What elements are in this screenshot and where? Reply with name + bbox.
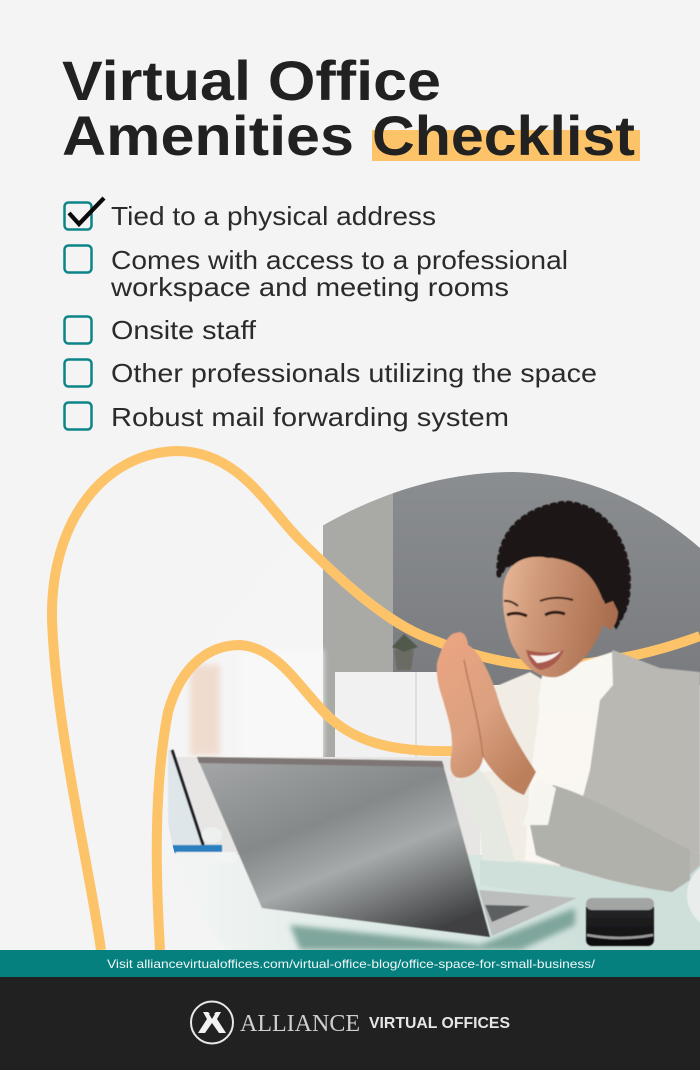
laptop base	[479, 890, 577, 936]
item: onsite staff: Onsite staff	[111, 315, 257, 345]
blouse	[525, 700, 600, 865]
eyebrows	[504, 598, 573, 606]
outer orange line	[52, 451, 700, 950]
photo: woman at laptop	[168, 503, 700, 946]
url bar: Visit alliancevirtualoffices.com/virtual-office-blog/office-space-for-small-business/	[107, 957, 596, 971]
item: other professionals: Other professionals utilizing the space	[111, 358, 597, 388]
sleeve	[530, 785, 690, 892]
speaker	[586, 898, 654, 946]
second monitor	[168, 750, 236, 862]
logo: ALLIANCE	[240, 1011, 360, 1037]
logo mark	[191, 1002, 233, 1044]
footer	[0, 977, 700, 1070]
item: workspace	[64, 245, 568, 302]
cuff	[524, 786, 556, 826]
photo: office room	[160, 470, 700, 950]
eyes	[507, 612, 565, 616]
title: Virtual Office	[62, 49, 441, 112]
glass sphere	[686, 868, 700, 922]
logo: VIRTUAL OFFICES	[369, 1015, 510, 1032]
smile	[526, 650, 564, 670]
desk	[160, 855, 700, 950]
title highlight	[372, 130, 640, 161]
hair lower mass	[543, 556, 624, 618]
hands	[437, 632, 536, 795]
url bar	[0, 950, 700, 977]
blazer	[560, 650, 700, 892]
turtleneck	[538, 652, 614, 705]
laptop lid	[197, 757, 490, 937]
overexposed jacket front	[450, 672, 560, 866]
item: mail forwarding: Robust mail forwarding system	[111, 402, 509, 432]
logo	[191, 1002, 510, 1044]
title: Amenities	[62, 104, 354, 167]
hair	[499, 503, 628, 625]
icon: check mark	[69, 198, 104, 224]
item: workspace: Comes with access to a professional	[111, 245, 568, 275]
item: onsite staff	[64, 315, 257, 345]
face	[503, 557, 618, 677]
title: Checklist	[372, 104, 635, 167]
item: workspace: workspace and meeting rooms	[110, 272, 509, 302]
inner orange line	[157, 645, 452, 950]
item: physical address: Tied to a physical address	[111, 201, 436, 231]
title	[62, 49, 640, 167]
checklist	[64, 198, 597, 432]
